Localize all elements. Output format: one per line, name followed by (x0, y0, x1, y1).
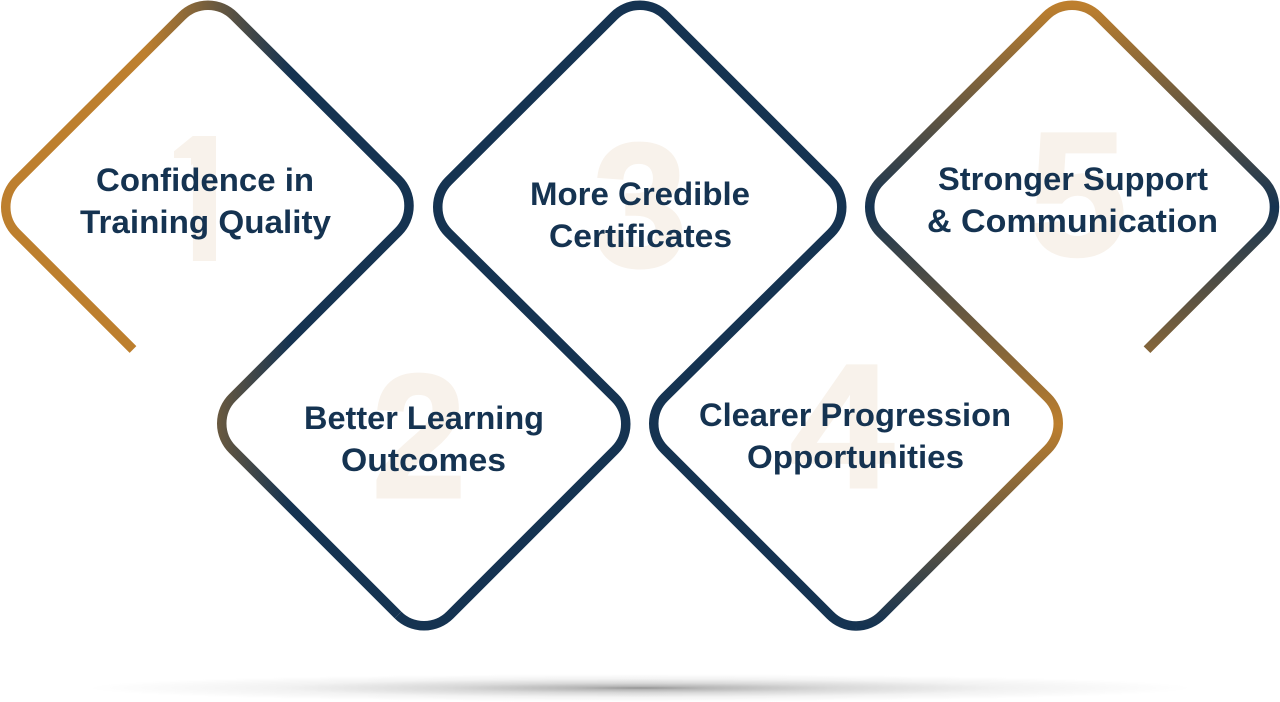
number 2: 2 (372, 339, 466, 535)
label: better learning outcomes: Better Learning (304, 400, 544, 436)
label: confidence in training quality (80, 162, 331, 240)
label: confidence in training quality: Confidence in (96, 162, 314, 198)
panel: item 4 (699, 329, 1011, 525)
label: clearer progression opportunities: Opportunities (747, 439, 964, 475)
number 4: 4 (790, 329, 894, 525)
label: more credible certificates (530, 176, 750, 254)
number 5: 5 (1029, 97, 1127, 293)
number 3: 3 (593, 108, 687, 304)
panel: item 1 (80, 136, 331, 261)
label: more credible certificates: Certificates (549, 218, 732, 254)
panel: item 3 (530, 108, 750, 304)
label: better learning outcomes: Outcomes (341, 442, 506, 478)
ground shadow (85, 674, 1195, 702)
number 1: 1 (153, 88, 251, 334)
label: clearer progression opportunities (699, 397, 1011, 475)
label: clearer progression opportunities: Clearer Progression (699, 397, 1011, 433)
label: stronger support and communication: & Communication (927, 203, 1218, 239)
label: more credible certificates: More Credible (530, 176, 750, 212)
panel: item 5 (927, 97, 1218, 293)
label: better learning outcomes (304, 400, 544, 478)
label: stronger support and communication (927, 161, 1218, 239)
panel: item 2 (304, 339, 544, 535)
label: stronger support and communication: Stronger Support (938, 161, 1208, 197)
label: confidence in training quality: Training Quality (80, 204, 331, 240)
